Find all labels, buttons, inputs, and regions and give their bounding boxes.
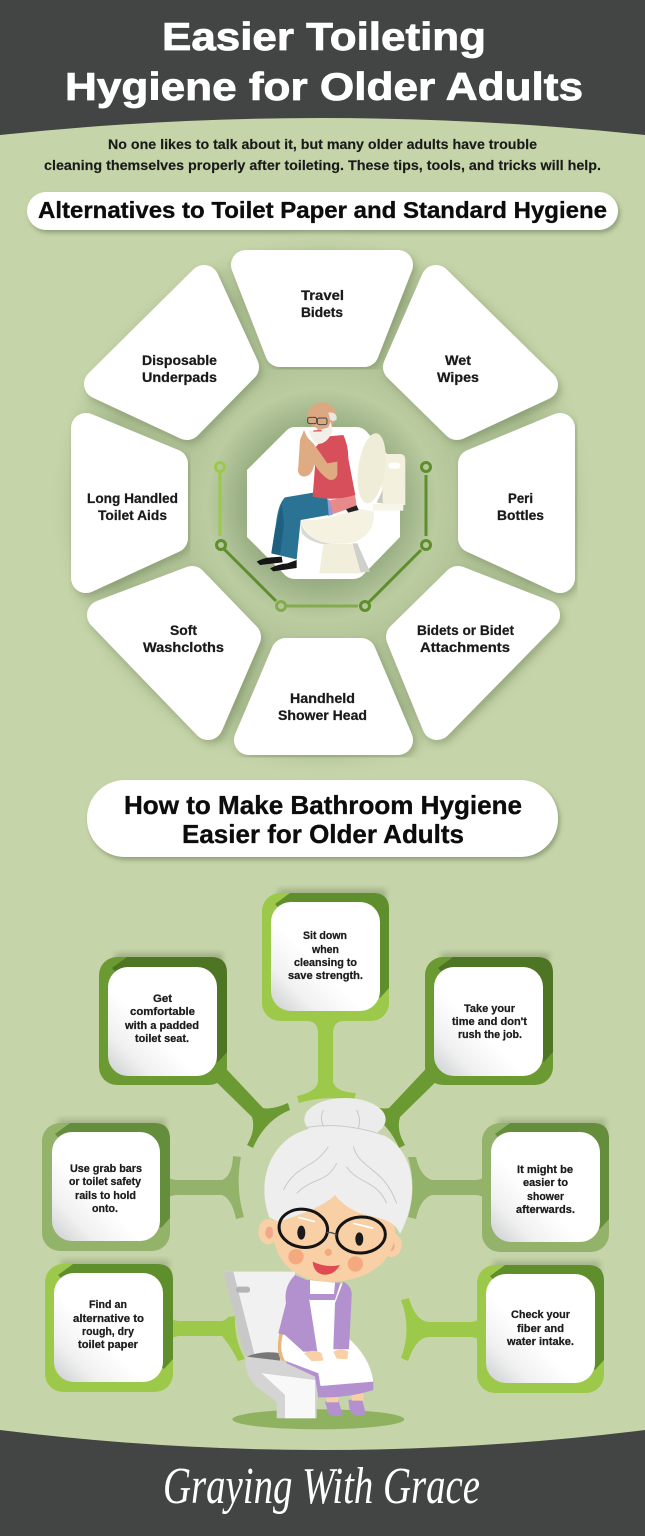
card: toilet paper alternative: toilet paper: [78, 1339, 139, 1351]
card: fiber and water: water intake.: [506, 1336, 574, 1348]
center octagon: [247, 427, 400, 579]
card: padded toilet seat: Get: [153, 993, 172, 1005]
card: take your time: [425, 953, 553, 1085]
title: [65, 16, 583, 109]
heading: how to make bathroom hygiene easier: [87, 780, 558, 857]
card: sit down: when: [311, 944, 339, 956]
header band: [0, 0, 645, 135]
intro text: cleaning themselves properly after toileting. These tips, tools, and tricks will help.: [44, 157, 601, 173]
card: take your time: Take your: [464, 1003, 516, 1015]
segment: soft washcloths: [102, 581, 246, 725]
panel: alternatives wheel: [47, 230, 597, 780]
segment: travel bidets: Bidets: [301, 305, 343, 320]
card: grab bars: rails to hold: [75, 1190, 136, 1202]
segment: long handled toilet aids: [86, 428, 178, 578]
toilet: [223, 1272, 317, 1418]
intro text: No one likes to talk about it, but many older adults have trouble: [108, 136, 537, 152]
card: padded toilet seat: comfortable: [130, 1006, 195, 1018]
icon: grandmother on toilet: [223, 1098, 412, 1429]
title: Hygiene for Older Adults: [65, 66, 583, 109]
circuit line: [216, 462, 430, 610]
heading: how to make bathroom hygiene easier: Easier for Older Adults: [182, 819, 464, 849]
segment: handheld shower head: Handheld: [290, 691, 355, 706]
segment: travel bidets: Travel: [301, 288, 344, 303]
intro text: [44, 136, 601, 173]
bun and hair: [304, 1098, 386, 1141]
segment: travel bidets: [246, 265, 398, 352]
card: grab bars: onto.: [92, 1203, 118, 1215]
segment: bidets or bidet attachments: [401, 581, 545, 725]
card: take your time: time and don't: [452, 1016, 527, 1028]
card: grab bars: or toilet safety: [69, 1176, 142, 1188]
card: fiber and water: [477, 1261, 604, 1393]
card: fiber and water: fiber and: [517, 1323, 564, 1335]
segment: peri bottles: Bottles: [497, 508, 544, 523]
connector: middle left tip: [165, 1156, 244, 1219]
segment: soft washcloths: Soft: [170, 623, 198, 638]
segment: wet wipes: [398, 280, 543, 425]
connector: upper left tip: [205, 1057, 290, 1148]
segment: handheld shower head: [249, 653, 398, 740]
card: toilet paper alternative: Find an: [89, 1299, 127, 1311]
segment: long handled toilet aids: Toilet Aids: [98, 508, 167, 523]
footer band: [0, 1430, 645, 1536]
segment: bidets or bidet attachments: Attachments: [420, 640, 510, 655]
card: shower afterwards: It might be: [517, 1164, 573, 1176]
card: toilet paper alternative: rough, dry: [82, 1326, 135, 1338]
card: shower afterwards: afterwards.: [516, 1204, 575, 1216]
card: padded toilet seat: toilet seat.: [135, 1033, 189, 1045]
card: grab bars: Use grab bars: [70, 1163, 142, 1175]
connector: top tip: [297, 1021, 356, 1103]
card: padded toilet seat: [99, 953, 227, 1085]
card: grab bars: [42, 1119, 170, 1251]
connector: upper right tip: [362, 1057, 447, 1148]
heading: alternatives: [27, 192, 618, 230]
card: sit down: Sit down: [303, 930, 347, 942]
connector: middle right tip: [408, 1157, 487, 1219]
card: toilet paper alternative: alternative to: [73, 1313, 144, 1325]
heading: how to make bathroom hygiene easier: How to Make Bathroom Hygiene: [124, 790, 522, 820]
card: toilet paper alternative: [45, 1260, 173, 1392]
heading: alternatives: Alternatives to Toilet Paper and Standard Hygiene: [38, 197, 607, 223]
panel: tips diagram: [42, 889, 609, 1429]
connector: lower left tip: [168, 1310, 245, 1361]
glasses and face: [277, 1206, 330, 1251]
segment: bidets or bidet attachments: Bidets or Bidet: [417, 623, 515, 638]
card: shower afterwards: [482, 1119, 609, 1252]
segment: long handled toilet aids: Long Handled: [87, 491, 178, 506]
card: padded toilet seat: with a padded: [124, 1020, 199, 1032]
segment: disposable underpads: Underpads: [142, 370, 217, 385]
segment: disposable underpads: Disposable: [142, 353, 218, 368]
card: shower afterwards: easier to: [523, 1177, 568, 1189]
icon: man on toilet: [257, 402, 405, 573]
segment: peri bottles: Peri: [508, 491, 533, 506]
segment: disposable underpads: [99, 280, 244, 425]
card: sit down: [262, 889, 389, 1021]
card: sit down: save strength.: [288, 970, 363, 982]
segment: soft washcloths: Washcloths: [143, 640, 224, 655]
connector: lower right tip: [401, 1298, 482, 1361]
segment: wet wipes: Wet: [445, 353, 472, 368]
card: shower afterwards: shower: [527, 1191, 565, 1203]
segment: handheld shower head: Shower Head: [278, 708, 367, 723]
card: take your time: rush the job.: [458, 1029, 522, 1041]
card: fiber and water: Check your: [511, 1309, 571, 1321]
card: sit down: cleansing to: [294, 957, 357, 969]
dress: [278, 1330, 290, 1362]
segment: wet wipes: Wipes: [437, 370, 479, 385]
segment: peri bottles: [473, 428, 560, 578]
title: Easier Toileting: [162, 16, 486, 59]
footer brand: Graying With Grace: Graying With Grace: [163, 1458, 480, 1515]
